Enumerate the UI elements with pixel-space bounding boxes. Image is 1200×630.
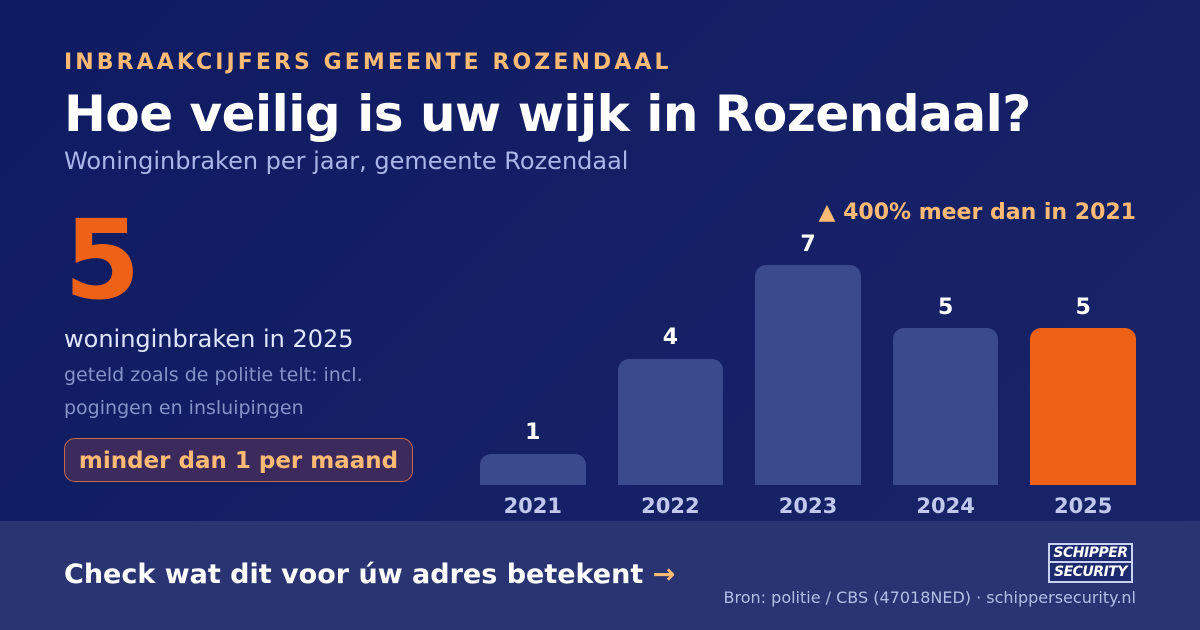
bar 2024: 2024 <box>916 494 975 518</box>
bar 2023 <box>755 232 861 518</box>
bar 2025: 5 <box>1076 295 1091 320</box>
bar 2023: 2023 <box>779 494 837 518</box>
bar 2021: 1 <box>525 420 540 445</box>
bar 2021: 2021 <box>504 494 562 518</box>
bar 2024 <box>893 295 998 518</box>
bar 2025: 2025 <box>1054 494 1112 518</box>
bar 2021 <box>480 420 586 518</box>
badge: minder dan 1 per maand <box>79 448 398 474</box>
title: Hoe veilig is uw wijk in Rozendaal? <box>64 85 1031 143</box>
footer band <box>0 521 1200 630</box>
eyebrow: INBRAAKCIJFERS GEMEENTE ROZENDAAL <box>64 50 672 75</box>
subtitle: Woninginbraken per jaar, gemeente Rozendaal <box>64 147 628 175</box>
bar 2025 <box>1030 295 1136 518</box>
bar 2022: 2022 <box>641 494 700 518</box>
logo <box>1048 543 1133 583</box>
logo: SCHIPPER <box>1053 545 1128 561</box>
bar 2022 <box>618 325 723 518</box>
stat label: woninginbraken in 2025 <box>64 325 354 353</box>
callout: ▲ 400% meer dan in 2021 <box>818 200 1136 225</box>
stat note: geteld zoals de politie telt: incl. pogingen en insluipingen <box>64 364 363 419</box>
bar chart <box>480 232 1136 518</box>
bar 2022: 4 <box>663 325 678 350</box>
logo: SECURITY <box>1054 564 1127 580</box>
big number: 5 <box>64 196 141 324</box>
badge <box>64 438 413 482</box>
call to action: Check wat dit voor úw adres betekent → <box>64 559 675 590</box>
bar 2024: 5 <box>938 295 953 320</box>
source: Bron: politie / CBS (47018NED) · schippersecurity.nl <box>724 588 1136 607</box>
bar 2023: 7 <box>800 232 816 257</box>
